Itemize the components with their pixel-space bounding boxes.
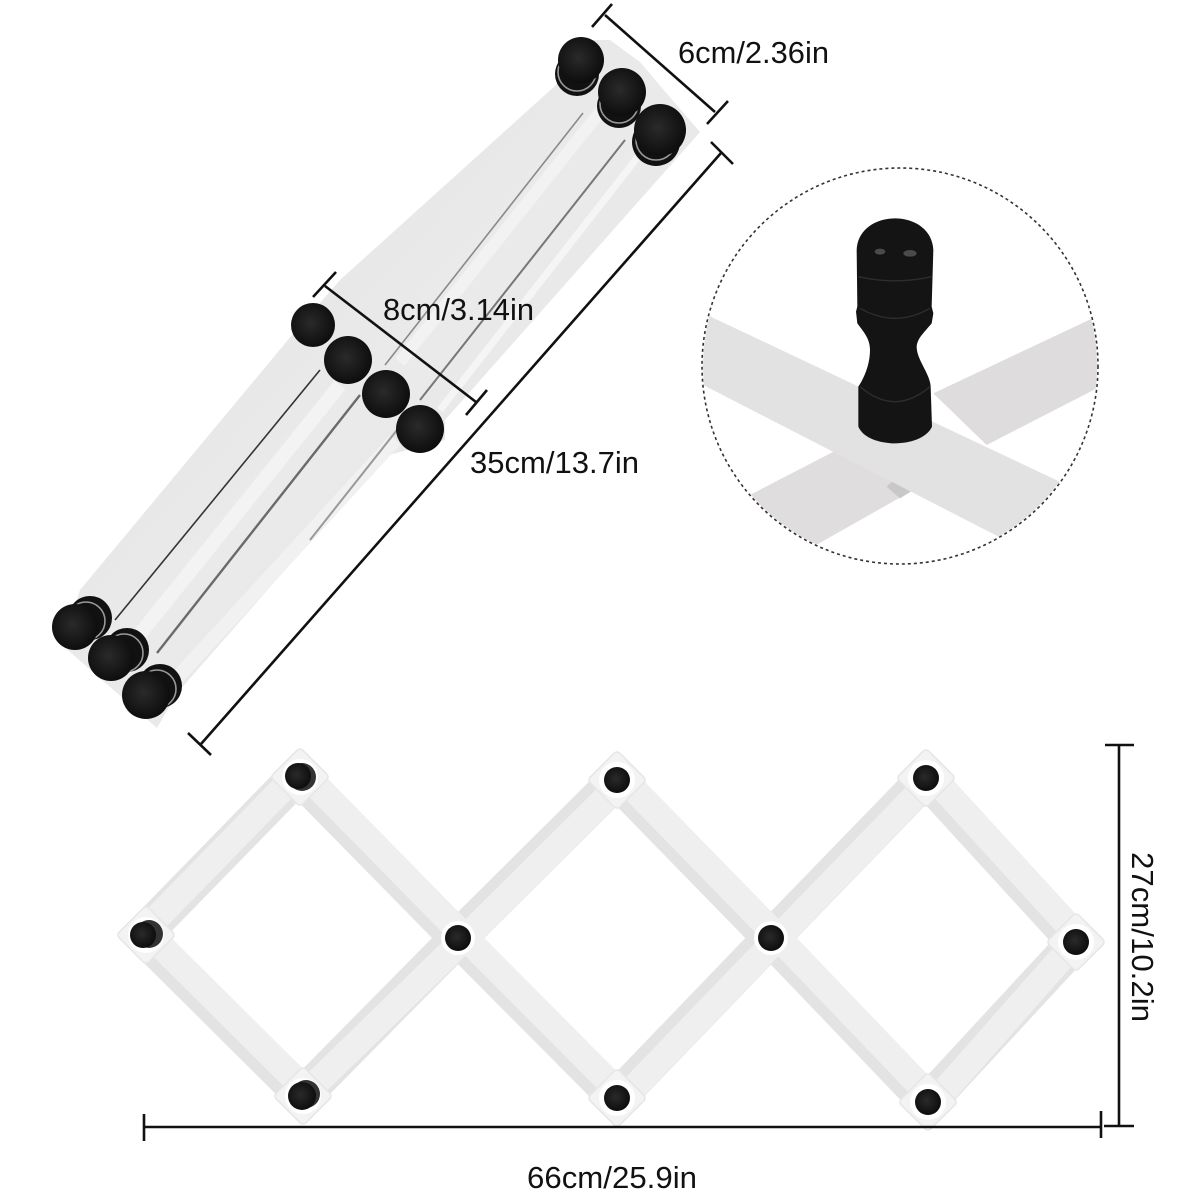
folded rack	[52, 37, 700, 728]
dimension: 8cm width: 8cm/3.14in	[383, 292, 534, 327]
dimension: 27cm height	[1104, 745, 1160, 1126]
slat gaps	[115, 112, 655, 680]
lattice slats	[142, 771, 1080, 1105]
dimension: 6cm width: 6cm/2.36in	[678, 35, 829, 70]
knobs: top group	[555, 37, 686, 166]
dimension: 8cm width	[313, 272, 534, 415]
dimension: 35cm length: 35cm/13.7in	[470, 445, 639, 480]
pegs	[128, 759, 1094, 1120]
folded slats	[62, 40, 700, 728]
detail circle: peg close-up	[697, 168, 1107, 564]
dimension: 27cm height: 27cm/10.2in	[1125, 852, 1160, 1022]
peg	[856, 218, 933, 443]
dimension: 6cm width	[592, 4, 829, 124]
knobs: bottom group	[52, 596, 182, 719]
front slat	[697, 310, 1067, 540]
knobs: middle group	[291, 303, 444, 453]
slat end caps	[116, 747, 1106, 1132]
rear slat	[934, 319, 1097, 445]
dotted circle outline	[702, 168, 1098, 564]
dimension: 35cm length	[188, 142, 733, 755]
dimension: 66cm width: 66cm/25.9in	[527, 1160, 697, 1195]
expanded rack	[116, 747, 1106, 1132]
dimension: 66cm width	[144, 1111, 1101, 1195]
